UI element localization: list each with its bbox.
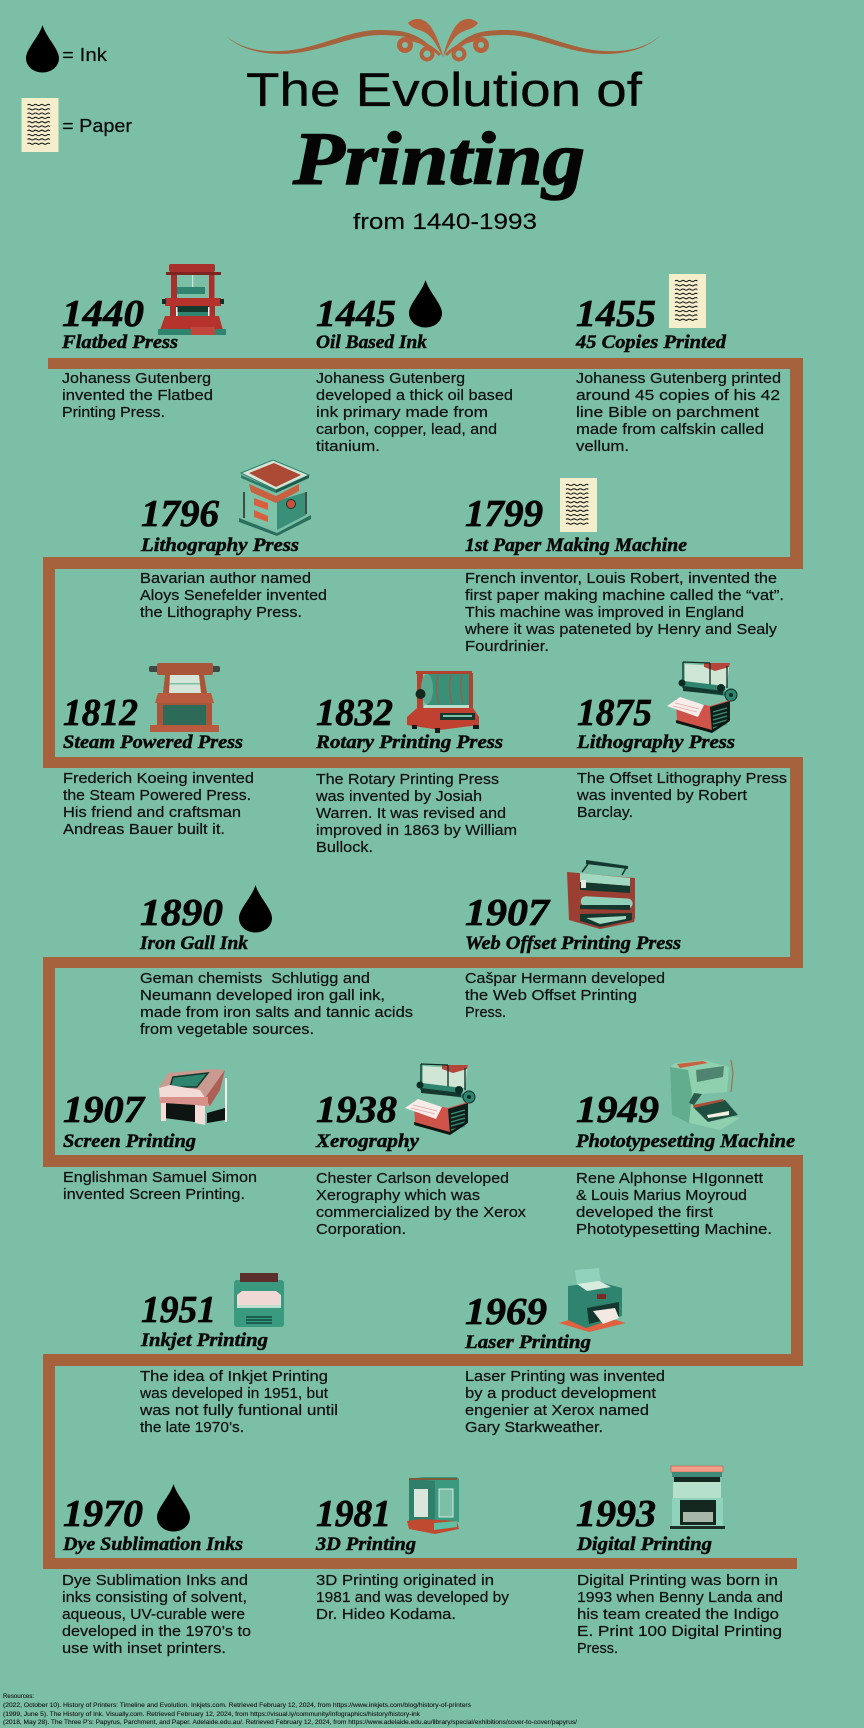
entry: 1796 Lithography Press: Lithography Press [140, 535, 299, 556]
icon: ink drop [157, 1484, 190, 1532]
entry: 1812 Steam Powered Press: 1812 [63, 692, 138, 734]
description: the late 1970’s. [140, 1420, 244, 1436]
description: use with inset printers. [62, 1641, 226, 1657]
description: Chester Carlson developed [316, 1171, 509, 1187]
description [577, 1573, 783, 1657]
description: carbon, copper, lead, and [316, 422, 497, 438]
description: 1981 and was developed by [316, 1590, 510, 1606]
entry: 1949 Phototypesetting Machine [575, 1060, 796, 1238]
description: Geman chemists Schlutigg and [140, 971, 370, 987]
icon: steam press [149, 663, 220, 732]
description: the Lithography Press. [140, 605, 302, 621]
title [246, 64, 643, 234]
entry: 1907 Screen Printing: Screen Printing [63, 1131, 196, 1152]
entry: 1445 Oil Based Ink: Oil Based Ink [316, 332, 427, 353]
description: Phototypesetting Machine. [576, 1222, 772, 1238]
icon: xerography machine [405, 1064, 475, 1135]
description: made from calfskin called [576, 422, 764, 438]
icon: digital printer [670, 1466, 725, 1529]
entry: 1875 Lithography Press: Lithography Press [576, 732, 735, 753]
description: around 45 copies of his 42 [576, 388, 780, 404]
timeline path [43, 358, 803, 1569]
description [140, 571, 327, 621]
entry: 1812 Steam Powered Press [63, 663, 254, 838]
icon: paper [560, 478, 597, 532]
description: from vegetable sources. [140, 1022, 314, 1038]
icon: 3D printer [407, 1477, 459, 1534]
entry: 1907 Web Offset Printing Press [465, 860, 681, 1021]
entry: 1796 Lithography Press: 1796 [141, 493, 220, 535]
description: Andreas Bauer built it. [63, 822, 225, 838]
icon: paper [669, 274, 706, 328]
description: Warren. It was revised and [316, 806, 506, 822]
description: developed the first [576, 1205, 713, 1221]
description: improved in 1863 by William [316, 823, 517, 839]
description: Bavarian author named [140, 571, 311, 587]
description: His friend and craftsman [63, 805, 241, 821]
description: Rene Alphonse HIgonnett [576, 1171, 763, 1187]
icon: laser printer [559, 1268, 626, 1332]
entry: 1832 Rotary Printing Press [315, 671, 517, 856]
description [140, 971, 413, 1038]
description: Laser Printing was invented [465, 1369, 665, 1385]
description: engenier at Xerox named [465, 1403, 649, 1419]
entry: 1907 Screen Printing: 1907 [63, 1089, 146, 1131]
entry: 1799 1st Paper Making Machine: 1799 [465, 493, 543, 535]
entry: 1907 Web Offset Printing Press: Web Offset Printing Press [465, 933, 681, 954]
description [576, 371, 781, 455]
resources: (2018, May 28). The Three P's: Papyrus, Parchment, and Paper. Adelaide.edu.au/. Retrieved February 12, 2024, from https://www.adelaide.edu.au/library/special/exhibitions/cover-to-cover/papyrus/ [3, 1719, 577, 1726]
description: was invented by Robert [576, 788, 747, 804]
description: Frederich Koeing invented [63, 771, 254, 787]
entry: 1993 Digital Printing [576, 1466, 783, 1657]
entry: 1993 Digital Printing: 1993 [576, 1493, 656, 1535]
entry: 1890 Iron Gall Ink [139, 885, 413, 1038]
description: Xerography which was [316, 1188, 480, 1204]
header ornament [225, 19, 661, 60]
entry: 1832 Rotary Printing Press: Rotary Printing Press [315, 732, 503, 753]
description: was developed in 1951, but [139, 1386, 328, 1402]
description: by a product development [465, 1386, 656, 1402]
legend: paper: = Paper [62, 115, 132, 136]
entry: 1455 45 Copies Printed: 1455 [576, 293, 656, 335]
entry: 1981 3D Printing: 3D Printing [315, 1534, 416, 1555]
description: the Web Offset Printing [465, 988, 637, 1004]
description: where it was pateneted by Henry and Sealy [464, 622, 778, 638]
description: Johaness Gutenberg printed [576, 371, 781, 387]
description: Dye Sublimation Inks and [62, 1573, 248, 1589]
entry: 1875 Lithography Press [576, 662, 787, 821]
entry: 1445 Oil Based Ink [316, 280, 513, 455]
legend: paper [22, 98, 132, 152]
entry: 1796 Lithography Press [140, 460, 327, 621]
description: the Steam Powered Press. [63, 788, 251, 804]
entry: 1938 Xerography: 1938 [316, 1089, 397, 1131]
entry: 1812 Steam Powered Press: Steam Powered Press [63, 732, 243, 753]
description: & Louis Marius Moyroud [576, 1188, 747, 1204]
entry: 1890 Iron Gall Ink: 1890 [140, 892, 223, 934]
entry: 1440 Flatbed Press: Flatbed Press [61, 332, 178, 353]
description: was invented by Josiah [315, 789, 482, 805]
description: made from iron salts and tannic acids [140, 1005, 413, 1021]
description: French inventor, Louis Robert, invented the [465, 571, 777, 587]
entry: 1445 Oil Based Ink: 1445 [316, 293, 396, 335]
description: The Offset Lithography Press [577, 771, 787, 787]
icon: web offset press [567, 860, 635, 929]
entry: 1440 Flatbed Press: 1440 [62, 293, 144, 335]
description: invented the Flatbed [62, 388, 213, 404]
title: Printing [292, 118, 585, 201]
description: Press. [577, 1641, 618, 1657]
entry: 1981 3D Printing: 1981 [316, 1493, 391, 1535]
description [315, 772, 517, 856]
description [465, 1369, 665, 1436]
description: invented Screen Printing. [63, 1187, 245, 1203]
description: Barclay. [577, 805, 633, 821]
entry: 1970 Dye Sublimation Inks [62, 1484, 251, 1657]
entry: 1938 Xerography [315, 1064, 527, 1238]
description [576, 771, 787, 821]
description: This machine was improved in England [465, 605, 744, 621]
description: Neumann developed iron gall ink, [140, 988, 385, 1004]
entry: 1907 Screen Printing [63, 1069, 257, 1203]
entry: 1799 1st Paper Making Machine [464, 478, 784, 655]
description: The Rotary Printing Press [316, 772, 499, 788]
description [316, 1573, 510, 1623]
icon: ink drop [409, 280, 442, 328]
entry: 1949 Phototypesetting Machine: 1949 [576, 1089, 659, 1131]
legend: ink [26, 25, 108, 72]
entry: 1970 Dye Sublimation Inks: Dye Sublimation Inks [62, 1534, 243, 1555]
description: Johaness Gutenberg [316, 371, 465, 387]
entry: 1970 Dye Sublimation Inks: 1970 [63, 1493, 143, 1535]
entry: 1969 Laser Printing: 1969 [465, 1291, 547, 1333]
description: Johaness Gutenberg [62, 371, 211, 387]
description [62, 371, 213, 421]
description: titanium. [316, 439, 380, 455]
icon: ink drop [239, 885, 272, 932]
description: 1993 when Benny Landa and [577, 1590, 783, 1606]
description [139, 1369, 338, 1436]
description: Digital Printing was born in [577, 1573, 778, 1589]
description: aqueous, UV-curable were [62, 1607, 245, 1623]
description: Printing Press. [62, 405, 165, 421]
description [316, 1171, 527, 1238]
entry: 1832 Rotary Printing Press: 1832 [316, 692, 393, 734]
description [576, 1171, 772, 1238]
description: 3D Printing originated in [316, 1573, 494, 1589]
description: Englishman Samuel Simon [63, 1170, 257, 1186]
description: vellum. [576, 439, 629, 455]
description [316, 371, 513, 455]
resources: (2022, October 10). History of Printers: Timeline and Evolution. Inkjets.com. Retrieved February 12, 2024, from https://www.inkjets.com/blog/history-of-printers [3, 1702, 471, 1709]
icon: offset press [667, 662, 737, 733]
description: developed in the 1970’s to [62, 1624, 251, 1640]
entry: 1951 Inkjet Printing: 1951 [141, 1289, 216, 1331]
entry: 1951 Inkjet Printing: Inkjet Printing [140, 1330, 268, 1351]
entry: 1799 1st Paper Making Machine: 1st Paper Making Machine [465, 535, 688, 556]
entry: 1440 Flatbed Press [61, 264, 226, 421]
description: inks consisting of solvent, [62, 1590, 247, 1606]
entry: 1949 Phototypesetting Machine: Phototypesetting Machine [575, 1131, 796, 1152]
description: was not fully funtional until [139, 1403, 338, 1419]
description: Corporation. [316, 1222, 406, 1238]
description: Bullock. [316, 840, 373, 856]
title: from 1440-1993 [353, 209, 537, 234]
legend: ink: = Ink [62, 44, 108, 65]
entry: 1951 Inkjet Printing [139, 1273, 338, 1436]
title: The Evolution of [246, 64, 643, 117]
description [465, 971, 665, 1021]
description: Cašpar Hermann developed [465, 971, 665, 987]
icon: phototypesetter [670, 1060, 740, 1130]
description: Gary Starkweather. [465, 1420, 603, 1436]
description: Dr. Hideo Kodama. [316, 1607, 456, 1623]
icon: flatbed press [158, 264, 226, 335]
description: commercialized by the Xerox [316, 1205, 527, 1221]
icon: screen printer [159, 1069, 227, 1125]
description: E. Print 100 Digital Printing [577, 1624, 782, 1640]
entry: 1455 45 Copies Printed [575, 274, 781, 455]
description: first paper making machine called the “vat”. [465, 588, 784, 604]
entry: 1969 Laser Printing: Laser Printing [464, 1332, 591, 1353]
description [63, 1170, 257, 1203]
entry: 1993 Digital Printing: Digital Printing [576, 1534, 712, 1555]
entry: 1907 Web Offset Printing Press: 1907 [465, 892, 551, 934]
entry: 1455 45 Copies Printed: 45 Copies Printed [575, 332, 727, 353]
description: ink primary made from [316, 405, 488, 421]
icon: rotary press [407, 671, 479, 733]
entry: 1938 Xerography: Xerography [315, 1131, 420, 1152]
description [63, 771, 254, 838]
description [464, 571, 784, 655]
description: The idea of Inkjet Printing [140, 1369, 328, 1385]
description [62, 1573, 251, 1657]
entry: 1890 Iron Gall Ink: Iron Gall Ink [139, 933, 248, 954]
entry: 1875 Lithography Press: 1875 [577, 692, 652, 734]
description: Aloys Senefelder invented [140, 588, 327, 604]
resources: Resources: [3, 1693, 34, 1700]
entry: 1969 Laser Printing [464, 1268, 665, 1436]
resources: (1999, June 5). The History of Ink. Visually.com. Retrieved February 12, 2024, from https://visual.ly/community/infographics/history/history-ink [3, 1711, 421, 1718]
description: developed a thick oil based [316, 388, 513, 404]
icon: lithography press [239, 460, 311, 536]
icon: inkjet printer [234, 1273, 284, 1327]
description: his team created the Indigo [577, 1607, 779, 1623]
resources [3, 1693, 577, 1726]
entry: 1981 3D Printing [315, 1477, 510, 1623]
description: Press. [465, 1005, 506, 1021]
description: line Bible on parchment [576, 405, 759, 421]
description: Fourdrinier. [465, 639, 549, 655]
